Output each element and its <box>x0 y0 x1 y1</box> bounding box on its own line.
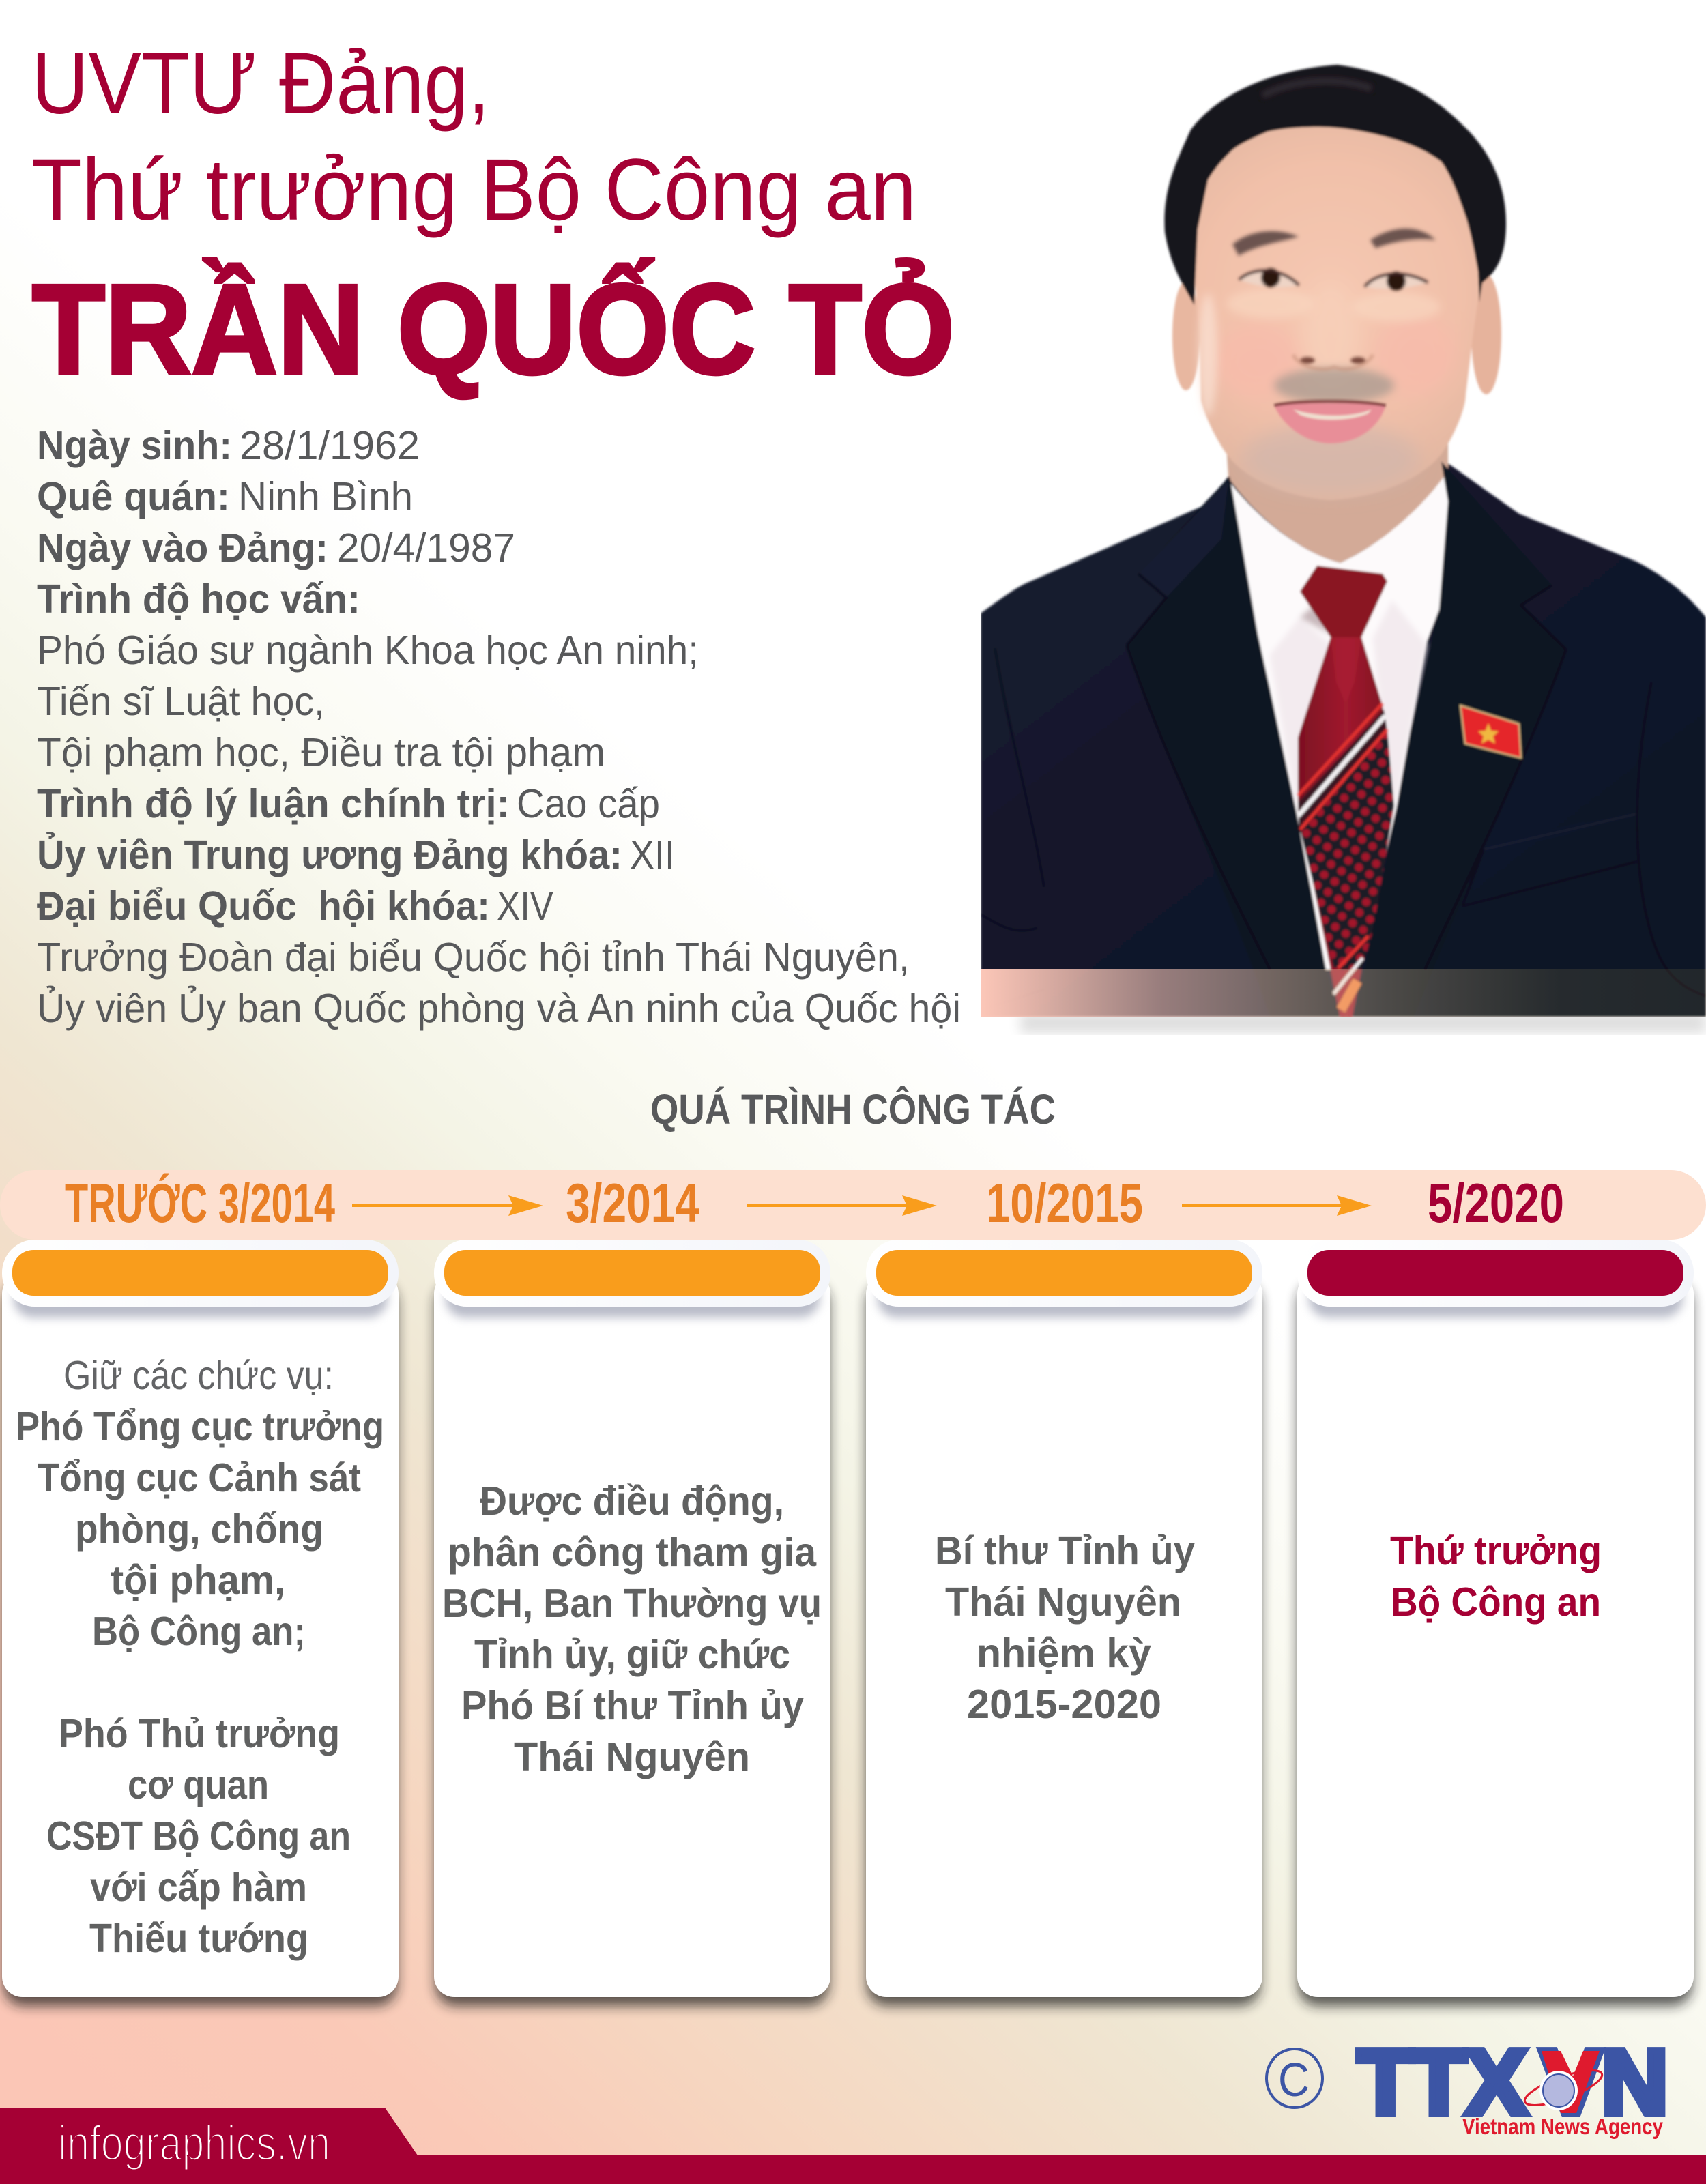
ears <box>1172 281 1200 390</box>
footer band <box>0 2108 1706 2184</box>
globe <box>1539 2071 1578 2110</box>
card body <box>1297 1273 1694 1997</box>
header pill <box>876 1250 1252 1296</box>
card 1 text: Bộ Công an; <box>92 1609 306 1654</box>
header pill <box>12 1250 388 1296</box>
header pill <box>444 1250 820 1296</box>
peach gradient band over photo <box>981 969 1706 1017</box>
timeline pill background <box>0 1170 1706 1240</box>
card 2 text <box>442 1479 822 1779</box>
card 2: 3/2014 <box>434 1240 830 2006</box>
tie patterned lower section <box>1300 729 1394 970</box>
card 1 text: tội phạm, <box>111 1558 285 1603</box>
hair <box>1164 65 1506 305</box>
committee member: Ủy viên Ủy ban Quốc phòng và An ninh của Quốc hội <box>37 985 961 1031</box>
header frame <box>1297 1240 1694 1307</box>
header shadow <box>446 1279 820 1317</box>
card 1 text <box>16 1353 384 1961</box>
lapel pin flag <box>1460 705 1521 758</box>
card 1 text: Phó Thủ trưởng <box>59 1711 340 1756</box>
card 3: 10/2015 <box>866 1240 1262 2006</box>
header shadow <box>1309 1279 1683 1317</box>
card 4: 5/2020 <box>1297 1240 1694 2006</box>
arrow 1 <box>352 1195 543 1216</box>
card body <box>434 1273 830 1997</box>
home town: Ninh Bình <box>238 474 413 519</box>
political theory: Trình độ lý luận chính trị: <box>37 781 510 826</box>
title line 2: Thứ trưởng Bộ Công an <box>31 141 916 239</box>
card 1 text: Phó Tổng cục trưởng <box>16 1404 384 1449</box>
header shadow <box>14 1279 388 1317</box>
header frame <box>434 1240 830 1307</box>
card 1 text: phòng, chống <box>75 1506 323 1552</box>
card 1: before 3/2014 <box>2 1240 399 2006</box>
moustache shadow <box>1274 368 1394 403</box>
card body <box>866 1273 1262 1997</box>
home town: Quê quán: <box>37 474 230 519</box>
title <box>31 35 955 401</box>
title line 1: UVTƯ Đảng, <box>31 35 490 132</box>
card 1 text: Tổng cục Cảnh sát <box>38 1455 361 1500</box>
central committee: XII <box>630 832 675 877</box>
card 1 text: với cấp hàm <box>90 1865 307 1910</box>
card 1 text: Giữ các chức vụ: <box>63 1353 334 1398</box>
eyebrows <box>1232 229 1436 256</box>
timeline bar <box>0 1170 1706 1240</box>
header frame <box>2 1240 399 1307</box>
title line 3: name: TRẦN QUỐC TỎ <box>32 258 955 401</box>
copyright symbol <box>1267 2049 1322 2108</box>
header pill <box>1307 1250 1683 1296</box>
shirt shading <box>1270 600 1427 805</box>
central committee: Ủy viên Trung ương Đảng khóa: <box>37 832 622 877</box>
home town <box>37 474 413 519</box>
face shading <box>1198 283 1457 494</box>
tie knot <box>1300 566 1387 637</box>
eyes <box>1239 268 1428 291</box>
card 3 text: nhiệm kỳ <box>977 1631 1151 1676</box>
footer site name: infographics.vn <box>58 2116 330 2171</box>
party entry date: 20/4/1987 <box>337 525 515 570</box>
date: before 3/2014: TRƯỚC 3/2014 <box>65 1172 335 1234</box>
card shadow <box>867 1283 1260 2006</box>
card 1 text: CSĐT Bộ Công an <box>46 1814 351 1859</box>
party entry date: Ngày vào Đảng: <box>37 525 328 570</box>
political theory: Cao cấp <box>517 781 660 826</box>
card 2 text: Tỉnh ủy, giữ chức <box>474 1632 790 1677</box>
portrait photo <box>981 0 1706 1033</box>
card 1 text: cơ quan <box>128 1762 269 1807</box>
card 4 text <box>1390 1528 1602 1625</box>
education heading: Trình độ học vấn: <box>37 577 360 622</box>
national assembly: XIV <box>497 884 554 929</box>
card 4 text: Bộ Công an <box>1391 1579 1601 1625</box>
biography text block <box>37 423 961 1031</box>
date: 5/2020: 5/2020 <box>1428 1173 1564 1234</box>
hair highlight <box>1262 81 1372 96</box>
face <box>1187 96 1482 500</box>
card 2 text: Phó Bí thư Tỉnh ủy <box>461 1683 804 1728</box>
left lapel <box>1127 476 1340 1017</box>
date: 3/2014: 3/2014 <box>566 1173 699 1234</box>
photo shadow <box>1020 1013 1706 1033</box>
nose <box>1293 355 1373 369</box>
card 3 text: Bí thư Tỉnh ủy <box>935 1528 1195 1573</box>
arrow 2 <box>747 1195 937 1216</box>
birth date <box>37 423 420 468</box>
card 2 text: phân công tham gia <box>448 1530 817 1575</box>
education line 2: Tiến sĩ Luật học, <box>37 679 325 724</box>
card 1 text: Thiếu tướng <box>89 1916 308 1961</box>
suit folds <box>981 648 1706 1010</box>
header frame <box>866 1240 1262 1307</box>
lapel edges <box>1127 574 1566 970</box>
card shadow <box>1298 1283 1692 2006</box>
header shadow <box>878 1279 1252 1317</box>
card shadow <box>435 1283 829 2006</box>
tie blade <box>1298 637 1394 1017</box>
birth date: 28/1/1962 <box>240 423 420 468</box>
card 3 text: 2015-2020 <box>967 1682 1161 1727</box>
card shadow <box>3 1283 397 2006</box>
arrow 3 <box>1182 1195 1372 1216</box>
card 2 text: Được điều động, <box>480 1479 784 1524</box>
red V <box>1542 2051 1600 2113</box>
logo tagline: Vietnam News Agency <box>1462 2114 1664 2139</box>
TTXVN logo <box>1357 2030 1668 2139</box>
photo: portrait illustration <box>981 0 1706 1017</box>
party entry date <box>37 525 515 570</box>
logo letters: TTXVN <box>1357 2030 1668 2134</box>
shirt <box>1228 471 1448 970</box>
mouth <box>1274 403 1386 443</box>
neck <box>1226 443 1451 564</box>
suit jacket <box>981 458 1706 1017</box>
national assembly: Đại biểu Quốc hội khóa: <box>37 884 490 929</box>
education line 1: Phó Giáo sư ngành Khoa học An ninh; <box>37 628 699 673</box>
right lapel <box>1355 461 1566 1017</box>
education line 3: Tội phạm học, Điều tra tội phạm <box>37 730 605 775</box>
card 3 text: Thái Nguyên <box>945 1579 1181 1625</box>
card 4 text: Thứ trưởng <box>1390 1528 1602 1573</box>
orbit ring <box>1521 2063 1606 2112</box>
card 2 text: BCH, Ban Thường vụ <box>442 1581 822 1626</box>
card 3 text <box>935 1528 1195 1727</box>
card 2 text: Thái Nguyên <box>514 1734 750 1779</box>
date: 10/2015: 10/2015 <box>986 1173 1143 1234</box>
tie stripes <box>1298 703 1387 1010</box>
delegation head: Trưởng Đoàn đại biểu Quốc hội tỉnh Thái Nguyên, <box>37 935 910 980</box>
section heading: QUÁ TRÌNH CÔNG TÁC <box>650 1086 1056 1133</box>
birth date: Ngày sinh: <box>37 423 232 468</box>
card body <box>2 1273 399 1997</box>
copyright symbol: C <box>1278 2053 1310 2106</box>
